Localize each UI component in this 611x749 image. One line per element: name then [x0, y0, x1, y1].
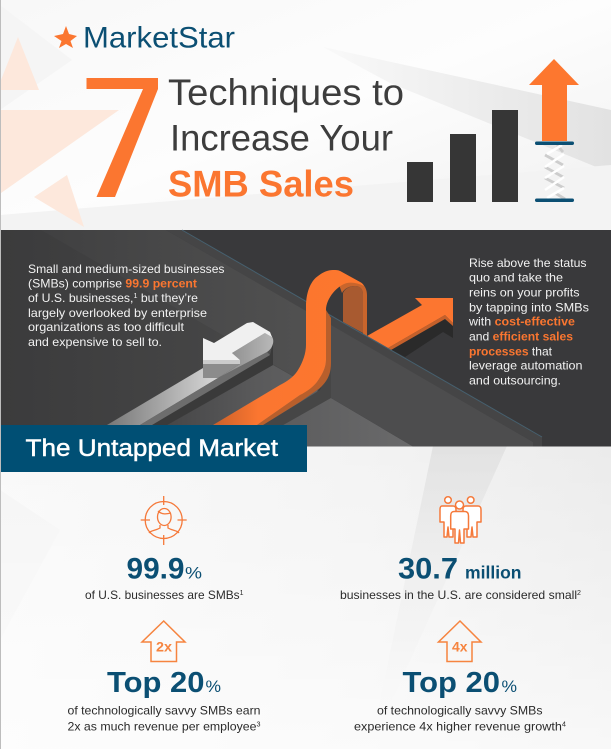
stat caption: 2 — [577, 590, 581, 597]
intro text left: 1 — [133, 293, 138, 300]
icon: group of people — [440, 497, 481, 543]
logo: MarketStar — [54, 22, 235, 54]
logo wordmark: MarketStar — [83, 22, 235, 54]
orange ribbon back fold — [343, 286, 363, 333]
stat: top 20 percent 4x: 4 — [562, 722, 566, 729]
ribbon face — [213, 270, 364, 425]
highlight line — [182, 230, 542, 437]
orange ribbon front — [213, 270, 364, 425]
icon: 4x arrow: 4x — [452, 638, 468, 654]
bar chart with spring arrow — [407, 59, 579, 202]
arrow shadow — [388, 315, 453, 357]
stat caption: of U.S. businesses are SMBs — [85, 588, 241, 602]
big numeral 7 — [86, 78, 158, 197]
intro text right: reins on your profits — [469, 285, 580, 299]
wall corner shadow — [317, 360, 331, 398]
shadow below head — [203, 364, 240, 378]
arrow shaft and head — [367, 298, 453, 348]
intro text right: and efficient sales — [469, 330, 573, 344]
white arrow going down — [107, 322, 273, 425]
white ribbon band — [107, 368, 218, 425]
left wall shading — [1, 230, 331, 446]
stat: 30.7 million: million — [465, 562, 522, 582]
stat value: 99.9 — [126, 552, 184, 586]
ribbon curl — [218, 333, 273, 378]
intro text right: by tapping into SMBs — [469, 300, 589, 314]
stat value: Top 20 — [402, 667, 500, 699]
stat value: Top 20 — [107, 667, 204, 699]
intro text left: but they’re — [137, 291, 198, 305]
dark intro panel — [0, 230, 611, 446]
intro text left: Small and medium-sized businesses — [28, 262, 224, 276]
bars — [407, 110, 518, 202]
shadow under orange ribbon — [262, 363, 331, 437]
stat: top 20 percent 2x: 2x as much revenue per employee — [68, 720, 252, 734]
wall front face — [331, 325, 533, 446]
intro text left: largely overlooked by enterprise — [28, 306, 207, 320]
stat: top 20 percent 4x: experience 4x higher revenue growth — [354, 720, 551, 734]
title line 3: SMB Sales — [168, 164, 354, 204]
title line 2: Increase Your — [170, 118, 393, 158]
orange arrow rising — [367, 298, 453, 357]
intro text right: with cost-effective — [468, 315, 575, 329]
intro text right: processes that — [469, 344, 553, 358]
arrowhead lip — [203, 360, 240, 364]
lower section background — [0, 446, 611, 749]
intro text right: and outsourcing. — [469, 374, 561, 388]
stat caption: of technologically savvy SMBs — [377, 703, 542, 717]
icon: spring — [535, 142, 574, 202]
intro text right: quo and take the — [469, 271, 563, 285]
icon: 4x arrow — [438, 621, 481, 662]
header background — [0, 0, 611, 231]
white ribbon dark edge — [140, 352, 270, 425]
intro text left: of U.S. businesses, — [28, 291, 131, 305]
intro text left: and expensive to sell to. — [28, 335, 162, 349]
stat: 30.7 million — [340, 497, 581, 602]
floor — [130, 365, 413, 446]
icon: rising arrow — [529, 59, 579, 141]
intro text right: leverage automation — [469, 359, 582, 373]
stat caption: businesses in the U.S. are considered small — [340, 588, 573, 602]
title — [86, 72, 404, 204]
stat: top 20 percent 4x — [354, 621, 566, 734]
stat: top 20 percent 2x: 3 — [256, 722, 261, 729]
icon: 2x arrow: 2x — [156, 638, 172, 654]
decorative peach star shapes — [1, 37, 119, 227]
stat caption: of technologically savvy SMBs earn — [68, 703, 260, 717]
intro text left: organizations as too difficult — [28, 320, 185, 334]
icon: target person — [141, 496, 187, 545]
icon: 2x arrow — [142, 621, 185, 662]
intro text right — [468, 256, 589, 388]
stat: 99.9 percent — [85, 496, 244, 602]
wall top surface — [166, 230, 542, 446]
icon: logo star — [54, 26, 77, 48]
stat: top 20 percent 2x: % — [206, 678, 221, 696]
white ribbon shadow — [152, 343, 273, 425]
ribbon edge — [257, 310, 331, 425]
stat: 99.9 percent: % — [185, 564, 202, 582]
stat: top 20 percent 2x — [68, 621, 261, 734]
section banner: The Untapped Market — [0, 425, 307, 472]
intro text left — [28, 262, 224, 349]
arrow edge — [388, 315, 453, 350]
back wall — [41, 230, 331, 398]
page left edge — [0, 0, 1, 749]
intro text left: (SMBs) comprise 99.9 percent — [28, 276, 197, 290]
stat: top 20 percent 4x: % — [502, 678, 517, 696]
arrowhead top — [203, 322, 272, 360]
title line 1: Techniques to — [168, 72, 404, 113]
section banner: The Untapped Market: The Untapped Market — [26, 435, 278, 462]
stat value: 30.7 — [398, 552, 458, 586]
stat caption: 1 — [240, 590, 244, 597]
intro text right: Rise above the status — [469, 256, 586, 270]
